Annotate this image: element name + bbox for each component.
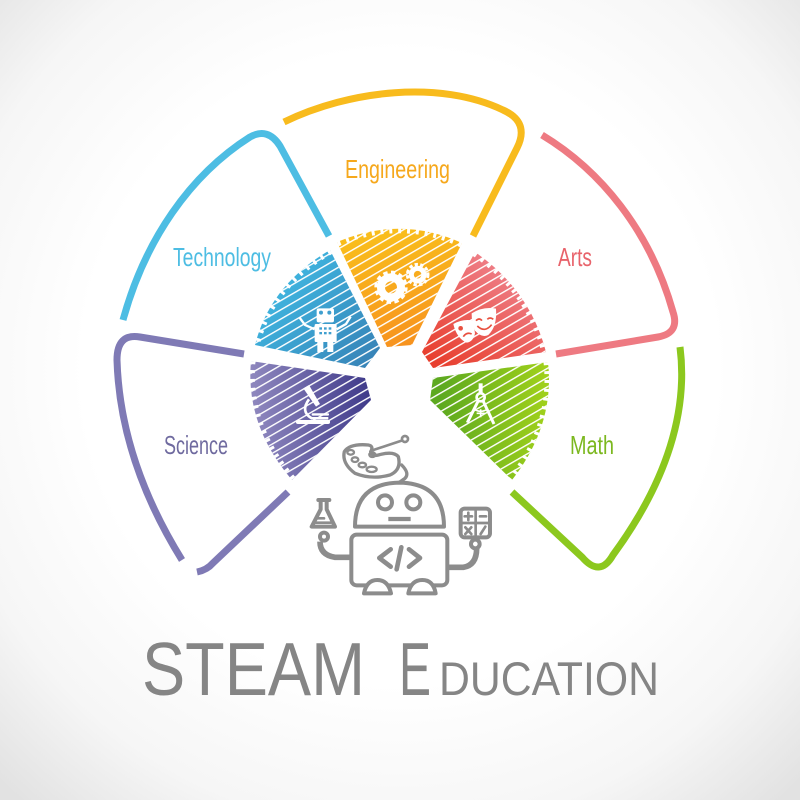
- label: Science: Science: [164, 430, 228, 460]
- wedge: Science: [250, 361, 371, 480]
- robot body: [351, 535, 447, 593]
- robot illustration: [312, 436, 490, 593]
- icon: compass: [467, 383, 494, 424]
- label: Arts: Arts: [558, 242, 592, 272]
- wedge: Arts: [422, 252, 546, 368]
- wedge: Technology: [255, 250, 380, 368]
- icon: gears: [376, 264, 428, 302]
- outline: Engineering: [284, 92, 521, 236]
- label: Technology: Technology: [173, 242, 271, 272]
- outline: Technology: [123, 134, 329, 320]
- outline: Math: [512, 347, 682, 567]
- icon: white robot: [299, 308, 351, 352]
- robot head: [355, 483, 444, 527]
- title: E: [399, 627, 431, 711]
- icon: microscope: [296, 385, 330, 424]
- wedge: Engineering: [337, 229, 462, 347]
- wedge: Math: [430, 362, 549, 480]
- outline: Arts: [542, 135, 675, 354]
- label: Engineering: Engineering: [345, 154, 450, 184]
- robot right arm and calculator: [448, 509, 490, 567]
- label: Math: Math: [570, 430, 614, 460]
- icon: theatre masks: [453, 308, 496, 343]
- robot left arm and flask: [312, 500, 350, 557]
- palette: [344, 436, 408, 482]
- title: DUCATION: [439, 652, 659, 705]
- outline: Science: [117, 336, 288, 572]
- title: STEAM: [142, 627, 365, 711]
